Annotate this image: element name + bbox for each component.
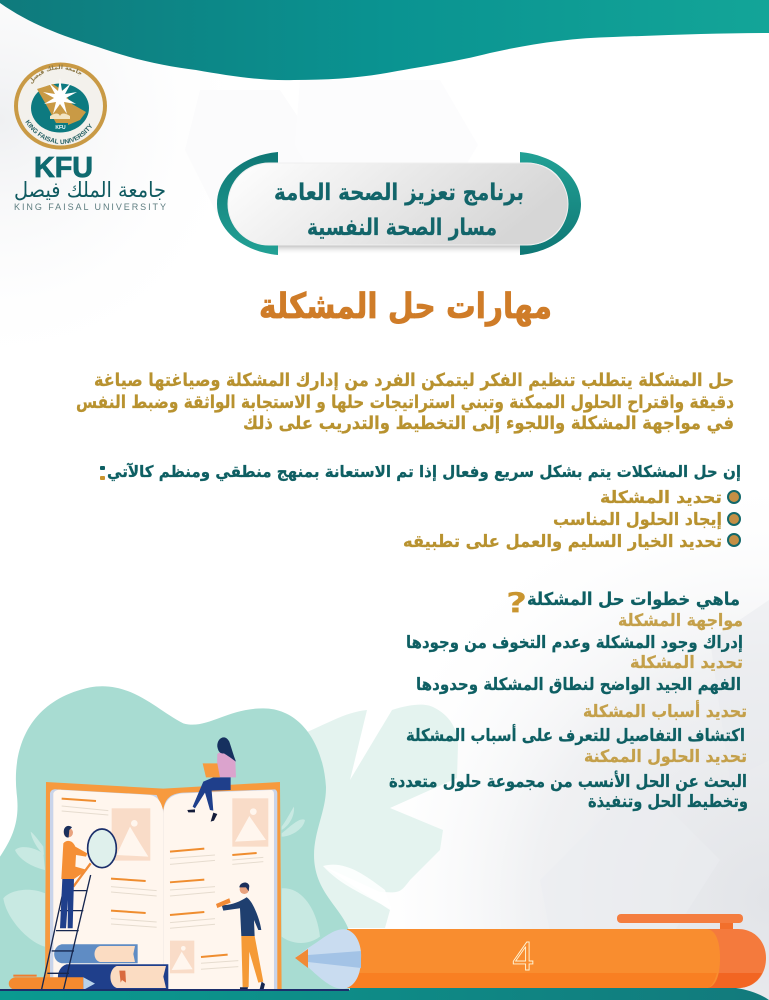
lead colon mark	[100, 466, 105, 480]
pencil body shadow	[347, 973, 717, 988]
page number: 4	[512, 934, 534, 980]
bullet 2: إيجاد الحلول المناسب	[553, 510, 722, 530]
woman with laptop	[187, 737, 236, 822]
pencil cap	[700, 929, 766, 988]
light leaf behind steps	[300, 705, 458, 928]
English university name: KING FAISAL UNIVERSITY	[14, 202, 166, 212]
question mark icon: ?	[506, 586, 527, 619]
left page	[53, 790, 163, 990]
banner drop shadow	[278, 245, 520, 255]
pencil cap shadow	[700, 973, 762, 988]
pencil tip	[295, 929, 361, 989]
illustration: people on an open book	[0, 686, 350, 992]
book cover	[45, 782, 282, 990]
logo: King Faisal University	[14, 62, 166, 212]
step 4 title: تحديد الحلول الممكنة	[584, 747, 747, 767]
stacked books	[54, 944, 168, 990]
large pencil	[295, 914, 766, 989]
pencil clip	[617, 914, 743, 929]
banner right arc	[520, 152, 581, 255]
bullet list	[403, 488, 740, 552]
faint text lines	[62, 806, 263, 969]
Arabic university name: جامعة الملك فيصل	[14, 178, 166, 202]
step 2 title: تحديد المشكلة	[630, 653, 743, 673]
program banner pill	[217, 152, 581, 255]
small pencil	[9, 975, 95, 990]
logo seal	[14, 62, 107, 150]
background hexagon pattern	[185, 80, 769, 985]
orange heading lines	[62, 799, 257, 957]
banner line 2: مسار الصحة النفسية	[307, 215, 497, 241]
intro paragraph: في مواجهة المشكلة واللجوء إلى التخطيط والتدريب على ذلك	[243, 413, 734, 434]
bottom teal band	[0, 988, 769, 1000]
logo seal: KING FAISAL UNIVERSITY	[25, 120, 92, 144]
top teal wave	[0, 0, 769, 80]
pencil body	[347, 929, 720, 988]
right page	[163, 790, 274, 990]
step 3 title: تحديد أسباب المشكلة	[583, 700, 747, 722]
steps list	[389, 611, 748, 812]
banner left arc	[217, 152, 278, 255]
logo seal: KFU	[55, 125, 66, 131]
KFU letters: KFU	[34, 152, 93, 184]
intro paragraph	[76, 370, 734, 434]
bullet 3: تحديد الخيار السليم والعمل على تطبيقه	[403, 532, 722, 552]
lead sentence: إن حل المشكلات يتم بشكل سريع وفعال إذا تم الاستعانة بمنهج منطقي ومنظم كالآتي	[107, 462, 741, 482]
main title: مهارات حل المشكلة	[259, 287, 552, 327]
ladder	[41, 875, 91, 991]
teal blob	[0, 686, 350, 992]
banner line 1: برنامج تعزيز الصحة العامة	[274, 180, 524, 206]
logo seal: جامعة الملك فيصل	[30, 64, 82, 84]
steps heading: ماهي خطوات حل المشكلة	[527, 590, 740, 610]
bullet 1: تحديد المشكلة	[600, 488, 722, 508]
man with magnifier	[60, 826, 116, 928]
step 4 body line 2: وتخطيط الحل وتنفيذة	[588, 792, 748, 812]
right page edge	[163, 789, 277, 990]
man writing	[216, 882, 265, 991]
banner body	[228, 163, 568, 245]
background leaves	[3, 807, 320, 947]
left page edge	[50, 789, 163, 990]
step 1 title: مواجهة المشكلة	[618, 611, 743, 631]
image placeholders	[112, 798, 268, 973]
